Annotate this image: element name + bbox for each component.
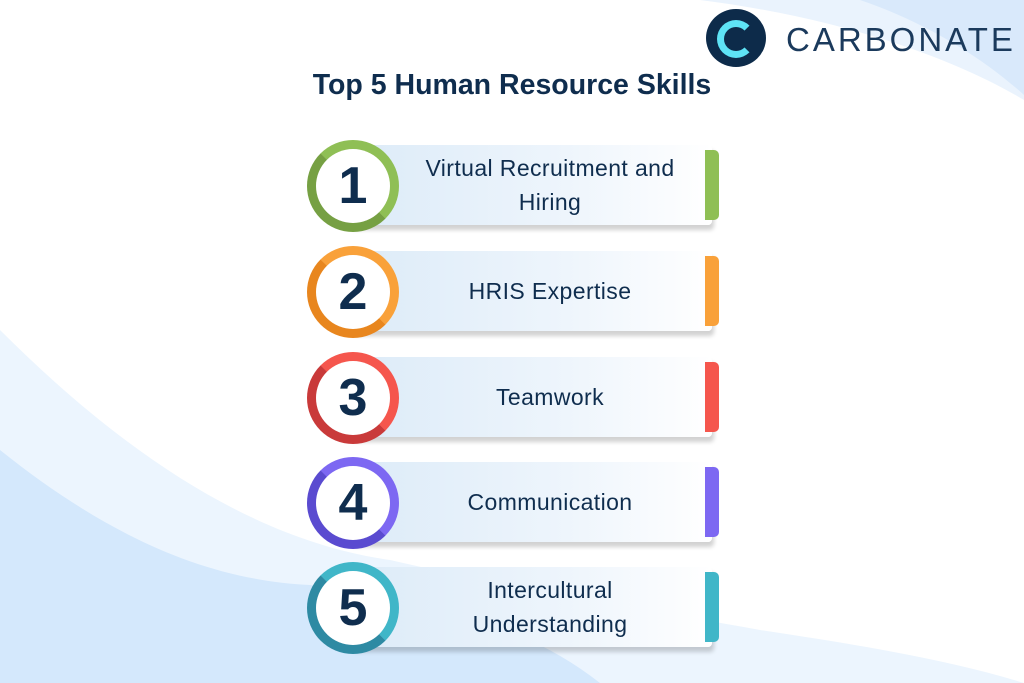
item 4	[307, 457, 719, 549]
item 1: Virtual Recruitment and Hiring	[425, 155, 675, 215]
item 5: 5	[339, 579, 367, 637]
item 5: Intercultural Understanding	[473, 577, 627, 637]
item 1: 1	[339, 157, 367, 215]
item 2	[307, 246, 719, 338]
item 2: HRIS Expertise	[469, 278, 631, 304]
item 3: 3	[339, 369, 367, 427]
item 1	[307, 140, 719, 232]
icon: logo C	[706, 9, 766, 67]
item 5	[307, 562, 719, 654]
item 4: Communication	[468, 489, 632, 515]
item 4: 4	[339, 474, 367, 532]
title: Top 5 Human Resource Skills	[313, 69, 711, 101]
item 3	[307, 352, 719, 444]
logo	[706, 9, 1016, 67]
item 3: Teamwork	[496, 384, 604, 410]
item 2: 2	[339, 263, 367, 321]
logo: CARBONATE	[786, 21, 1016, 58]
